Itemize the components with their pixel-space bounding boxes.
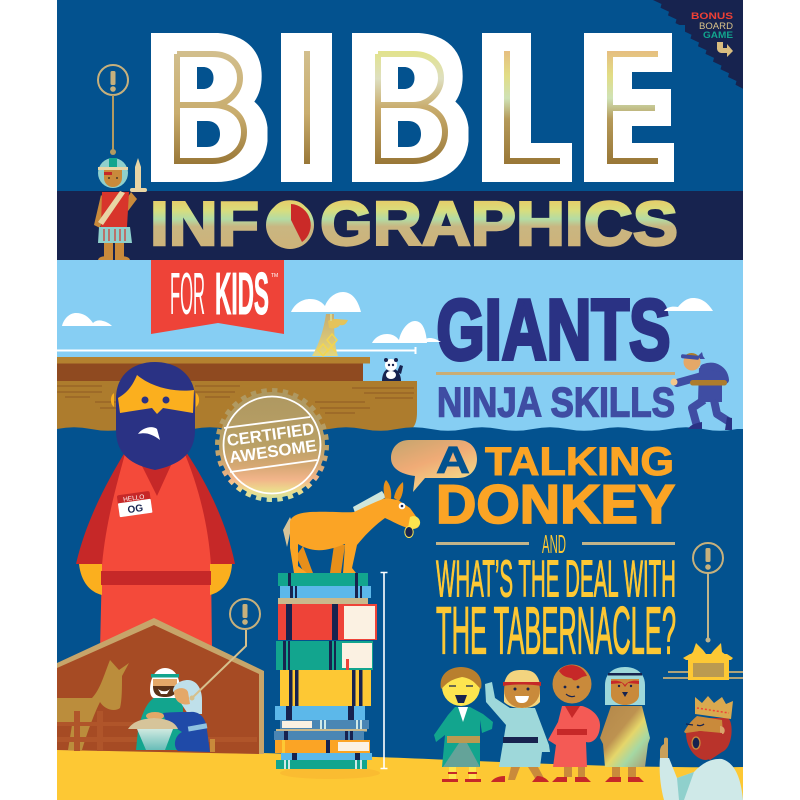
sky band bbox=[57, 260, 743, 432]
banner: for kids: TM bbox=[271, 273, 278, 279]
corner: bonus board game: BOARD bbox=[699, 21, 733, 32]
manger with baby bbox=[128, 712, 178, 750]
heading: talking: TALKING bbox=[485, 440, 674, 484]
navy title band bbox=[57, 191, 743, 260]
alert icon with line: ark of the covenant bbox=[693, 543, 723, 642]
and with divider rules: AND bbox=[542, 529, 566, 559]
icon: og the giant bbox=[76, 362, 235, 650]
book 13 bbox=[276, 760, 367, 769]
sea waves bbox=[57, 427, 743, 800]
icon: stable bbox=[57, 618, 264, 754]
og hands bbox=[79, 564, 232, 595]
king eye bbox=[686, 724, 704, 726]
ark hull bbox=[57, 357, 417, 432]
joseph bbox=[136, 668, 183, 750]
og right eye bbox=[162, 396, 170, 404]
height ruler bbox=[380, 572, 388, 768]
book 2 bbox=[280, 586, 371, 598]
title: BIBLE: B bbox=[352, 6, 466, 210]
og face bbox=[118, 375, 194, 414]
clouds bbox=[62, 292, 427, 343]
character: boy with green robe bbox=[434, 667, 493, 782]
book 7 bbox=[275, 706, 365, 720]
book 12 bbox=[281, 753, 372, 760]
and with divider rules bbox=[436, 529, 675, 559]
fence bbox=[57, 711, 257, 751]
character: boy with shimmering robe bbox=[600, 667, 650, 782]
banner: for kids: FOR bbox=[170, 261, 205, 327]
seal: certified awesome: AWESOME bbox=[228, 437, 318, 467]
heading: giants: GIANTS bbox=[436, 283, 670, 378]
heading: ninja skills: NINJA SKILLS bbox=[437, 378, 675, 426]
name tag: OG bbox=[127, 503, 144, 516]
title: INFOGRAPHICS: INF bbox=[150, 190, 259, 259]
alert icon with line: soldier bbox=[98, 65, 128, 155]
og cape and arms bbox=[76, 452, 235, 564]
seal: certified awesome bbox=[219, 392, 325, 498]
book 10 bbox=[274, 731, 364, 740]
crown jewels bbox=[697, 708, 729, 713]
king crown bbox=[695, 696, 733, 719]
king face bbox=[684, 716, 723, 734]
king mouth bbox=[692, 737, 700, 749]
sand shadow under books bbox=[280, 767, 380, 779]
bar chart: stack of books bbox=[274, 573, 377, 769]
speech bubble with A bbox=[391, 440, 477, 492]
character: boy with red robe bbox=[548, 664, 600, 782]
title: BIBLE: L bbox=[482, 5, 569, 209]
book 4 bbox=[278, 604, 377, 640]
king hand bbox=[660, 738, 668, 758]
og belt bbox=[101, 571, 211, 585]
king robe bbox=[660, 758, 743, 800]
title: BIBLE bbox=[140, 5, 685, 210]
icon: donkey bbox=[283, 480, 420, 573]
horizon line bbox=[57, 347, 416, 354]
book 8 bbox=[280, 720, 369, 729]
king ear bbox=[720, 726, 725, 734]
title: INFOGRAPHICS: O bbox=[268, 190, 312, 259]
icon: nativity family bbox=[128, 668, 215, 752]
title: BIBLE: B bbox=[151, 6, 265, 210]
book 3 bbox=[278, 598, 368, 604]
king back hair bbox=[698, 718, 732, 760]
character: king bbox=[660, 696, 743, 800]
title: BIBLE: E bbox=[584, 5, 672, 209]
book 5 bbox=[276, 641, 373, 674]
speech bubble with A: A bbox=[436, 440, 470, 482]
icon: panda bbox=[382, 358, 403, 381]
title: INFOGRAPHICS: GRAPHICS bbox=[320, 190, 678, 259]
icon: ninja bbox=[670, 352, 732, 430]
donkey silhouette bbox=[57, 660, 129, 750]
title: BIBLE: I bbox=[281, 5, 332, 209]
name tag bbox=[117, 491, 153, 517]
book 1 bbox=[278, 573, 368, 586]
text: KIDS bbox=[215, 261, 269, 327]
title: INFOGRAPHICS bbox=[150, 190, 678, 259]
og hair and beard bbox=[116, 362, 195, 470]
heading: donkey: DONKEY bbox=[436, 473, 675, 535]
icon: ark of the covenant bbox=[663, 643, 743, 680]
king beard bbox=[686, 731, 722, 760]
og mouth bbox=[138, 427, 160, 440]
sand dune bbox=[57, 750, 743, 800]
corner: bonus board game: GAME bbox=[703, 30, 733, 41]
mary bbox=[163, 680, 215, 752]
corner: bonus board game: BONUS bbox=[691, 11, 733, 22]
seal: certified awesome: CERTIFIED bbox=[226, 420, 316, 450]
og ears bbox=[111, 393, 199, 407]
clouds overlapping giants bbox=[420, 298, 713, 342]
pie chart letter O bbox=[266, 201, 314, 249]
og robe bbox=[100, 450, 212, 650]
icon: giraffe bbox=[312, 314, 348, 356]
book 11 bbox=[275, 740, 370, 753]
character: waving boy bbox=[485, 670, 550, 782]
og neck v bbox=[135, 452, 177, 496]
alert icon with line: nativity bbox=[190, 599, 260, 700]
book 6 bbox=[280, 670, 371, 706]
book 9 bbox=[276, 729, 367, 732]
robe shadow bbox=[677, 772, 694, 800]
divider under giants bbox=[436, 372, 675, 375]
icon: roman soldier bbox=[94, 158, 147, 260]
corner: bonus board game bbox=[653, 0, 743, 89]
name tag: HELLO bbox=[123, 494, 145, 504]
